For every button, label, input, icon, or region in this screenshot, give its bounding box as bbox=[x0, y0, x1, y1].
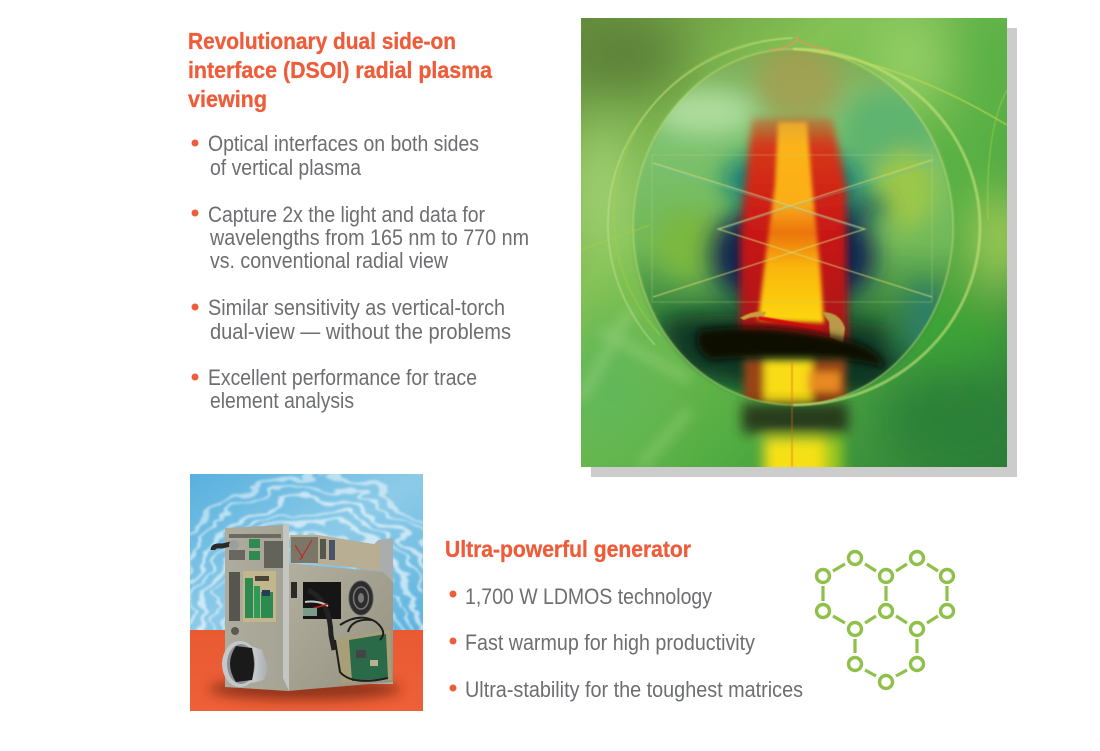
orange band bbox=[190, 630, 423, 711]
bullet: optical interfaces: Optical interfaces on both sides bbox=[208, 131, 479, 156]
heading: DSOI: interface (DSOI) radial plasma bbox=[188, 57, 492, 83]
bullet list: generator bbox=[450, 584, 803, 702]
side window with cables bbox=[303, 582, 341, 619]
heading: DSOI bbox=[188, 28, 492, 112]
bullet: trace analysis: Excellent performance for trace bbox=[208, 365, 477, 390]
control board bbox=[243, 571, 276, 622]
bullet: trace analysis bbox=[192, 365, 477, 413]
bullet: capture 2x: Capture 2x the light and data for bbox=[208, 202, 485, 227]
green terminals bbox=[249, 539, 260, 548]
plasma torch image bbox=[581, 18, 1007, 467]
heading: DSOI: Revolutionary dual side-on bbox=[188, 28, 456, 54]
rings bbox=[581, 36, 1007, 405]
bullet: sensitivity bbox=[192, 295, 511, 344]
torch collar bbox=[740, 312, 845, 343]
circuit board bbox=[337, 630, 392, 683]
bullet: sensitivity: Similar sensitivity as vertical-torch bbox=[208, 295, 505, 320]
light streaks bbox=[581, 310, 690, 467]
heading: DSOI: viewing bbox=[188, 86, 267, 112]
machine shadow bbox=[209, 678, 401, 700]
left vent bbox=[229, 572, 240, 621]
cable gland bbox=[213, 543, 235, 550]
round duct bbox=[240, 642, 268, 686]
left face bbox=[225, 525, 288, 691]
icon: hexagon molecule bbox=[816, 552, 954, 688]
flange bbox=[283, 523, 289, 691]
below sphere column bbox=[742, 403, 848, 483]
bullet: capture 2x: vs. conventional radial view bbox=[210, 248, 449, 273]
red plasma bands bbox=[740, 118, 848, 345]
bullet: capture 2x: wavelengths from 165 nm to 770 nm bbox=[209, 225, 529, 250]
star lines and frame bbox=[652, 155, 935, 467]
flame halo bbox=[711, 150, 887, 313]
dark torch base bbox=[697, 327, 885, 368]
bullet: capture 2x bbox=[192, 202, 529, 273]
bullet: trace analysis: element analysis bbox=[210, 388, 354, 413]
generator photo bbox=[190, 474, 423, 711]
connector bbox=[231, 627, 239, 635]
fan bbox=[349, 581, 373, 615]
bullet: optical interfaces bbox=[192, 131, 479, 180]
flame core bbox=[758, 122, 824, 323]
bullet: warmup: Fast warmup for high productivity bbox=[465, 630, 756, 655]
right rear panel bbox=[360, 538, 393, 684]
top vent grille on left bbox=[229, 534, 281, 538]
bullet list: DSOI benefits bbox=[192, 131, 529, 413]
sphere bbox=[633, 49, 953, 405]
right side panel bbox=[288, 563, 393, 691]
bullet: sensitivity: dual-view — without the problems bbox=[210, 319, 511, 344]
power supply bbox=[290, 535, 380, 570]
bullet: LDMOS: 1,700 W LDMOS technology bbox=[465, 584, 713, 609]
bullet: optical interfaces: of vertical plasma bbox=[210, 155, 361, 180]
shadow behind plasma image bbox=[591, 28, 1017, 477]
blue swirl background bbox=[190, 474, 423, 711]
bullet: stability: Ultra-stability for the toughest matrices bbox=[465, 677, 803, 702]
lower reflection bbox=[744, 360, 846, 410]
heading: generator: Ultra-powerful generator bbox=[445, 536, 691, 562]
generator unit bbox=[213, 523, 393, 691]
